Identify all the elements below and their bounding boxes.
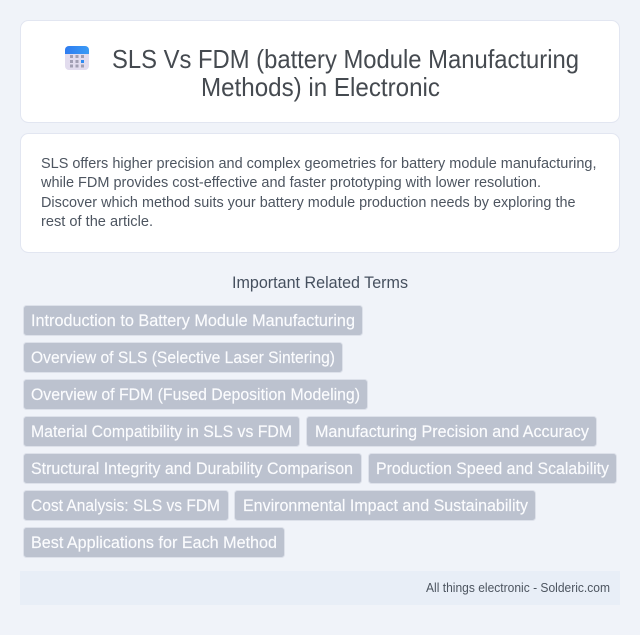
tag: Cost Analysis: SLS vs FDM bbox=[31, 497, 220, 515]
title bbox=[112, 44, 579, 102]
tag: Overview of SLS (Selective Laser Sintering) bbox=[31, 349, 335, 367]
tag: Manufacturing Precision and Accuracy bbox=[315, 423, 590, 441]
tag bbox=[24, 490, 228, 520]
heading: related terms: Important Related Terms bbox=[232, 274, 408, 292]
tag bbox=[24, 306, 362, 336]
tag list bbox=[24, 306, 616, 558]
footer: All things electronic - Solderic.com bbox=[426, 581, 610, 595]
tag bbox=[24, 342, 342, 372]
tag bbox=[24, 528, 284, 558]
tag bbox=[306, 416, 596, 446]
footer bbox=[20, 571, 620, 605]
tag: Overview of FDM (Fused Deposition Modeling) bbox=[31, 386, 360, 404]
icon: calendar bbox=[65, 46, 89, 70]
tag: Best Applications for Each Method bbox=[31, 534, 277, 552]
tag bbox=[24, 416, 300, 446]
tag: Environmental Impact and Sustainability bbox=[243, 497, 529, 515]
panel: title card bbox=[20, 20, 620, 122]
panel: intro paragraph bbox=[20, 134, 620, 252]
panel: intro paragraph: Discover which method suits your battery module production needs by exploring the bbox=[41, 195, 576, 211]
title: SLS Vs FDM (battery Module Manufacturing bbox=[112, 44, 579, 74]
tag: Material Compatibility in SLS vs FDM bbox=[31, 423, 292, 441]
tag bbox=[24, 454, 362, 484]
tag: Production Speed and Scalability bbox=[376, 460, 610, 478]
tag: Introduction to Battery Module Manufacturing bbox=[31, 312, 355, 330]
tag bbox=[368, 454, 616, 484]
panel: intro paragraph: SLS offers higher precision and complex geometries for battery module manufacturing, bbox=[41, 156, 596, 172]
tag: Structural Integrity and Durability Comparison bbox=[31, 460, 353, 478]
title: Methods) in Electronic bbox=[201, 72, 440, 102]
tag bbox=[24, 380, 368, 410]
panel: intro paragraph: while FDM provides cost-effective and faster prototyping with lower resolution. bbox=[40, 175, 541, 191]
panel: intro paragraph: rest of the article. bbox=[41, 214, 153, 230]
tag bbox=[234, 490, 536, 520]
